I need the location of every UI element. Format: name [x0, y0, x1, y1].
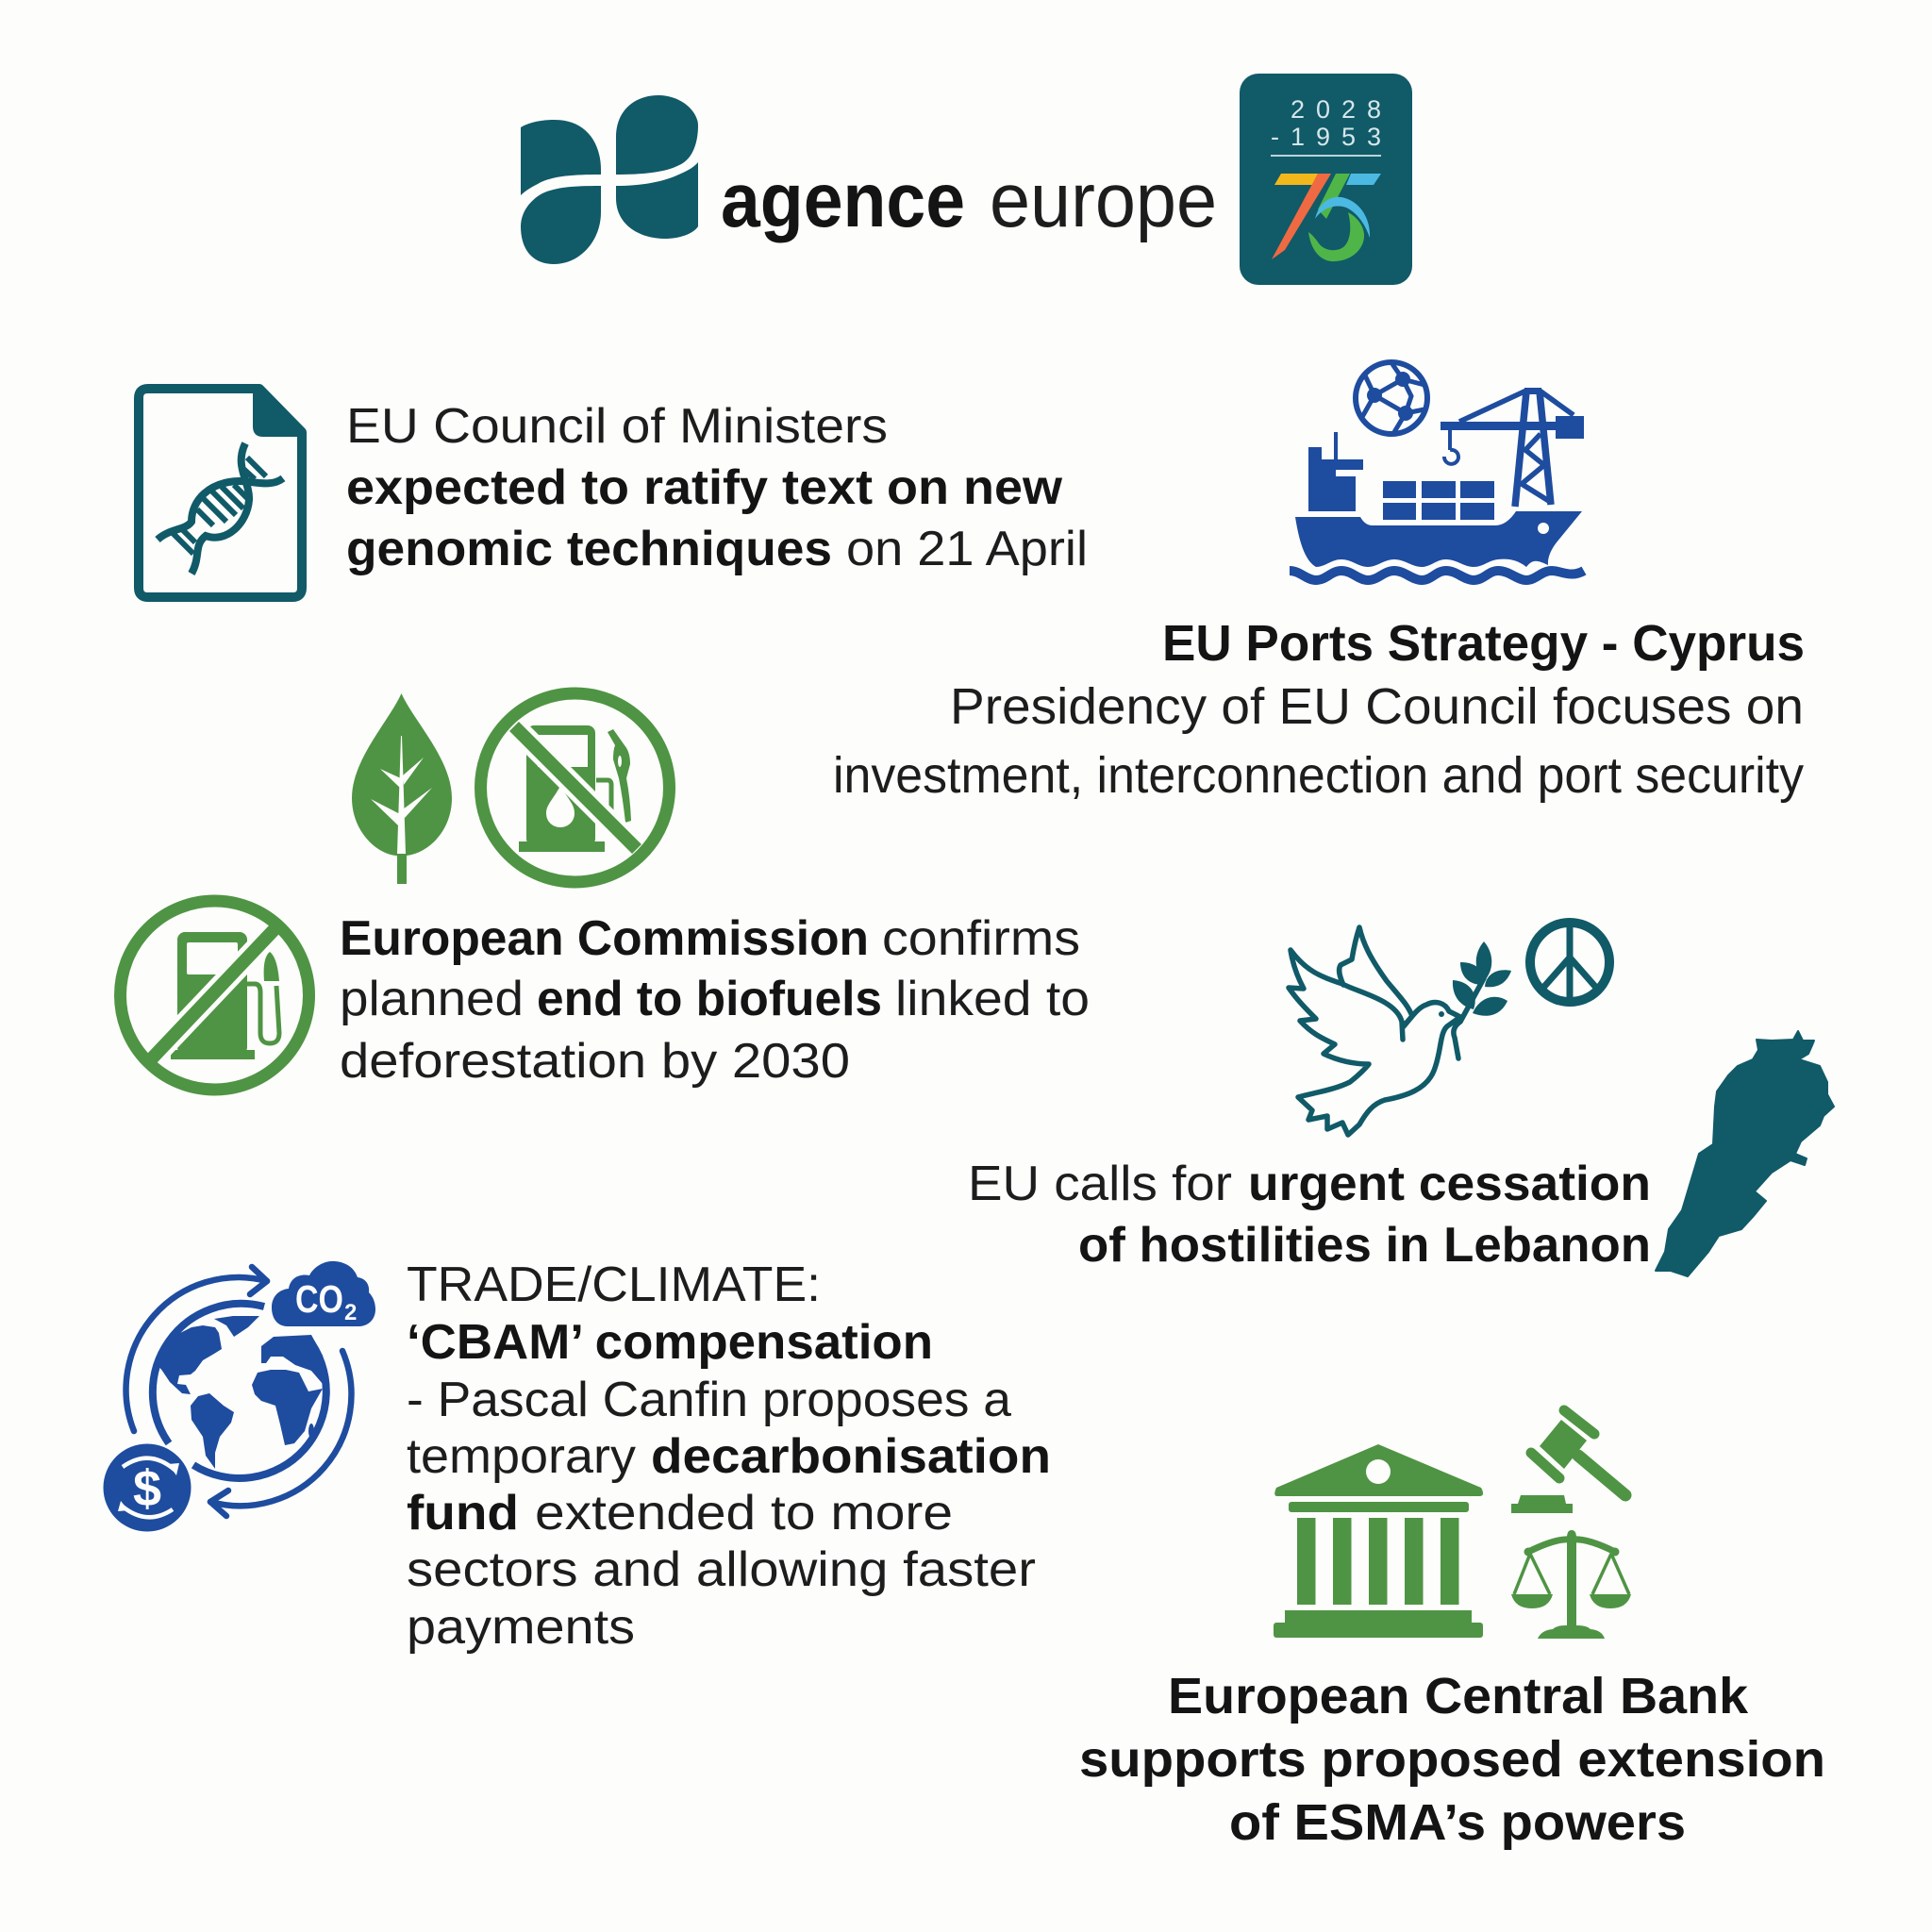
text: genomic techniques: expected to ratify text on new [346, 460, 1063, 515]
icon: scales of justice [1511, 1530, 1631, 1639]
text: EU ports strategy: investment, interconnection and port security [833, 747, 1804, 804]
text: Lebanon: urgent cessation [1248, 1157, 1651, 1211]
text: biofuels: planned [340, 972, 524, 1026]
logo wordmark [721, 158, 1217, 243]
icon: CO2 cloud: CO [295, 1277, 343, 1321]
text: CBAM: temporary [407, 1429, 636, 1484]
icon: crane [1441, 388, 1584, 507]
icon: agence europe logo mark [521, 95, 698, 264]
icon: CO2 cloud: 2 [344, 1300, 357, 1325]
text: EU ports strategy [833, 615, 1805, 804]
text: EU ports strategy: Presidency of EU Council focuses on [950, 678, 1804, 735]
text: European Central Bank [1079, 1668, 1825, 1851]
panel: CBAM [104, 1257, 1051, 1655]
icon: no fuel pump with drop [481, 693, 670, 882]
text: CBAM [407, 1257, 1051, 1655]
icon: football, ship and crane [1290, 362, 1584, 580]
text: CBAM: extended to more [535, 1486, 953, 1541]
75th anniversary badge [1240, 74, 1412, 285]
panel: EU ports strategy [833, 362, 1805, 804]
text: biofuels: linked to [895, 972, 1090, 1026]
text: European Central Bank: supports proposed extension [1079, 1731, 1825, 1788]
text: biofuels: European Commission [340, 911, 869, 966]
text: European Central Bank: of ESMA’s powers [1229, 1794, 1686, 1851]
panel: Lebanon [968, 923, 1834, 1276]
logo wordmark: europe [990, 158, 1217, 243]
icon: map of Lebanon [1656, 1031, 1834, 1276]
text: biofuels: confirms [882, 911, 1080, 966]
text: biofuels: deforestation by 2030 [340, 1034, 850, 1089]
icon: no fuel pump [121, 901, 309, 1090]
arrow: to money [210, 1351, 351, 1516]
icon: bank building [1274, 1444, 1483, 1638]
text: genomic techniques [346, 399, 1088, 576]
icon: cargo ship [1290, 432, 1584, 580]
icon: dollar coin: $ [133, 1460, 161, 1517]
icon: globe [153, 1304, 328, 1478]
panel: European Central Bank [1079, 1410, 1825, 1851]
text: biofuels: end to biofuels [537, 972, 882, 1026]
75th anniversary badge: -1953 [1271, 123, 1381, 151]
icon: dollar coin [104, 1443, 191, 1532]
text: CBAM: sectors and allowing faster [407, 1542, 1036, 1597]
text: CBAM: TRADE/CLIMATE: [407, 1257, 821, 1312]
icon: CO2 cloud [272, 1261, 375, 1326]
icon: globe with CO2 and money cycle [104, 1261, 375, 1532]
icon: leaf [352, 693, 452, 884]
text: CBAM: - Pascal Canfin proposes a [407, 1373, 1011, 1427]
header: logo and anniversary badge [521, 74, 1412, 285]
text: Lebanon: EU calls for [968, 1157, 1232, 1211]
text: biofuels [340, 911, 1090, 1089]
arrow: to CO2 cloud [126, 1267, 267, 1431]
text: genomic techniques: genomic techniques [346, 522, 832, 576]
text: CBAM: decarbonisation [651, 1429, 1051, 1484]
text: EU ports strategy: EU Ports Strategy - Cyprus [1162, 615, 1805, 672]
icon: dove with olive branch [1289, 927, 1511, 1135]
text: European Central Bank: European Central Bank [1168, 1668, 1749, 1724]
logo wordmark: agence [721, 158, 965, 243]
icon: peace symbol [1530, 923, 1609, 1002]
icon: document with DNA [139, 389, 302, 597]
text: genomic techniques: on 21 April [846, 522, 1088, 576]
text: CBAM: fund [407, 1486, 519, 1541]
text: Lebanon [968, 1157, 1651, 1273]
icon: gavel [1511, 1410, 1625, 1513]
text: genomic techniques: EU Council of Ministers [346, 399, 888, 454]
panel: biofuels and deforestation [121, 693, 1090, 1090]
text: CBAM: ‘CBAM’ compensation [407, 1315, 933, 1370]
panel: genomic techniques [139, 389, 1088, 597]
75th anniversary badge: 2028 [1291, 95, 1381, 124]
icon: football [1356, 362, 1427, 434]
text: CBAM: payments [407, 1600, 635, 1655]
text: Lebanon: of hostilities in Lebanon [1078, 1218, 1651, 1273]
